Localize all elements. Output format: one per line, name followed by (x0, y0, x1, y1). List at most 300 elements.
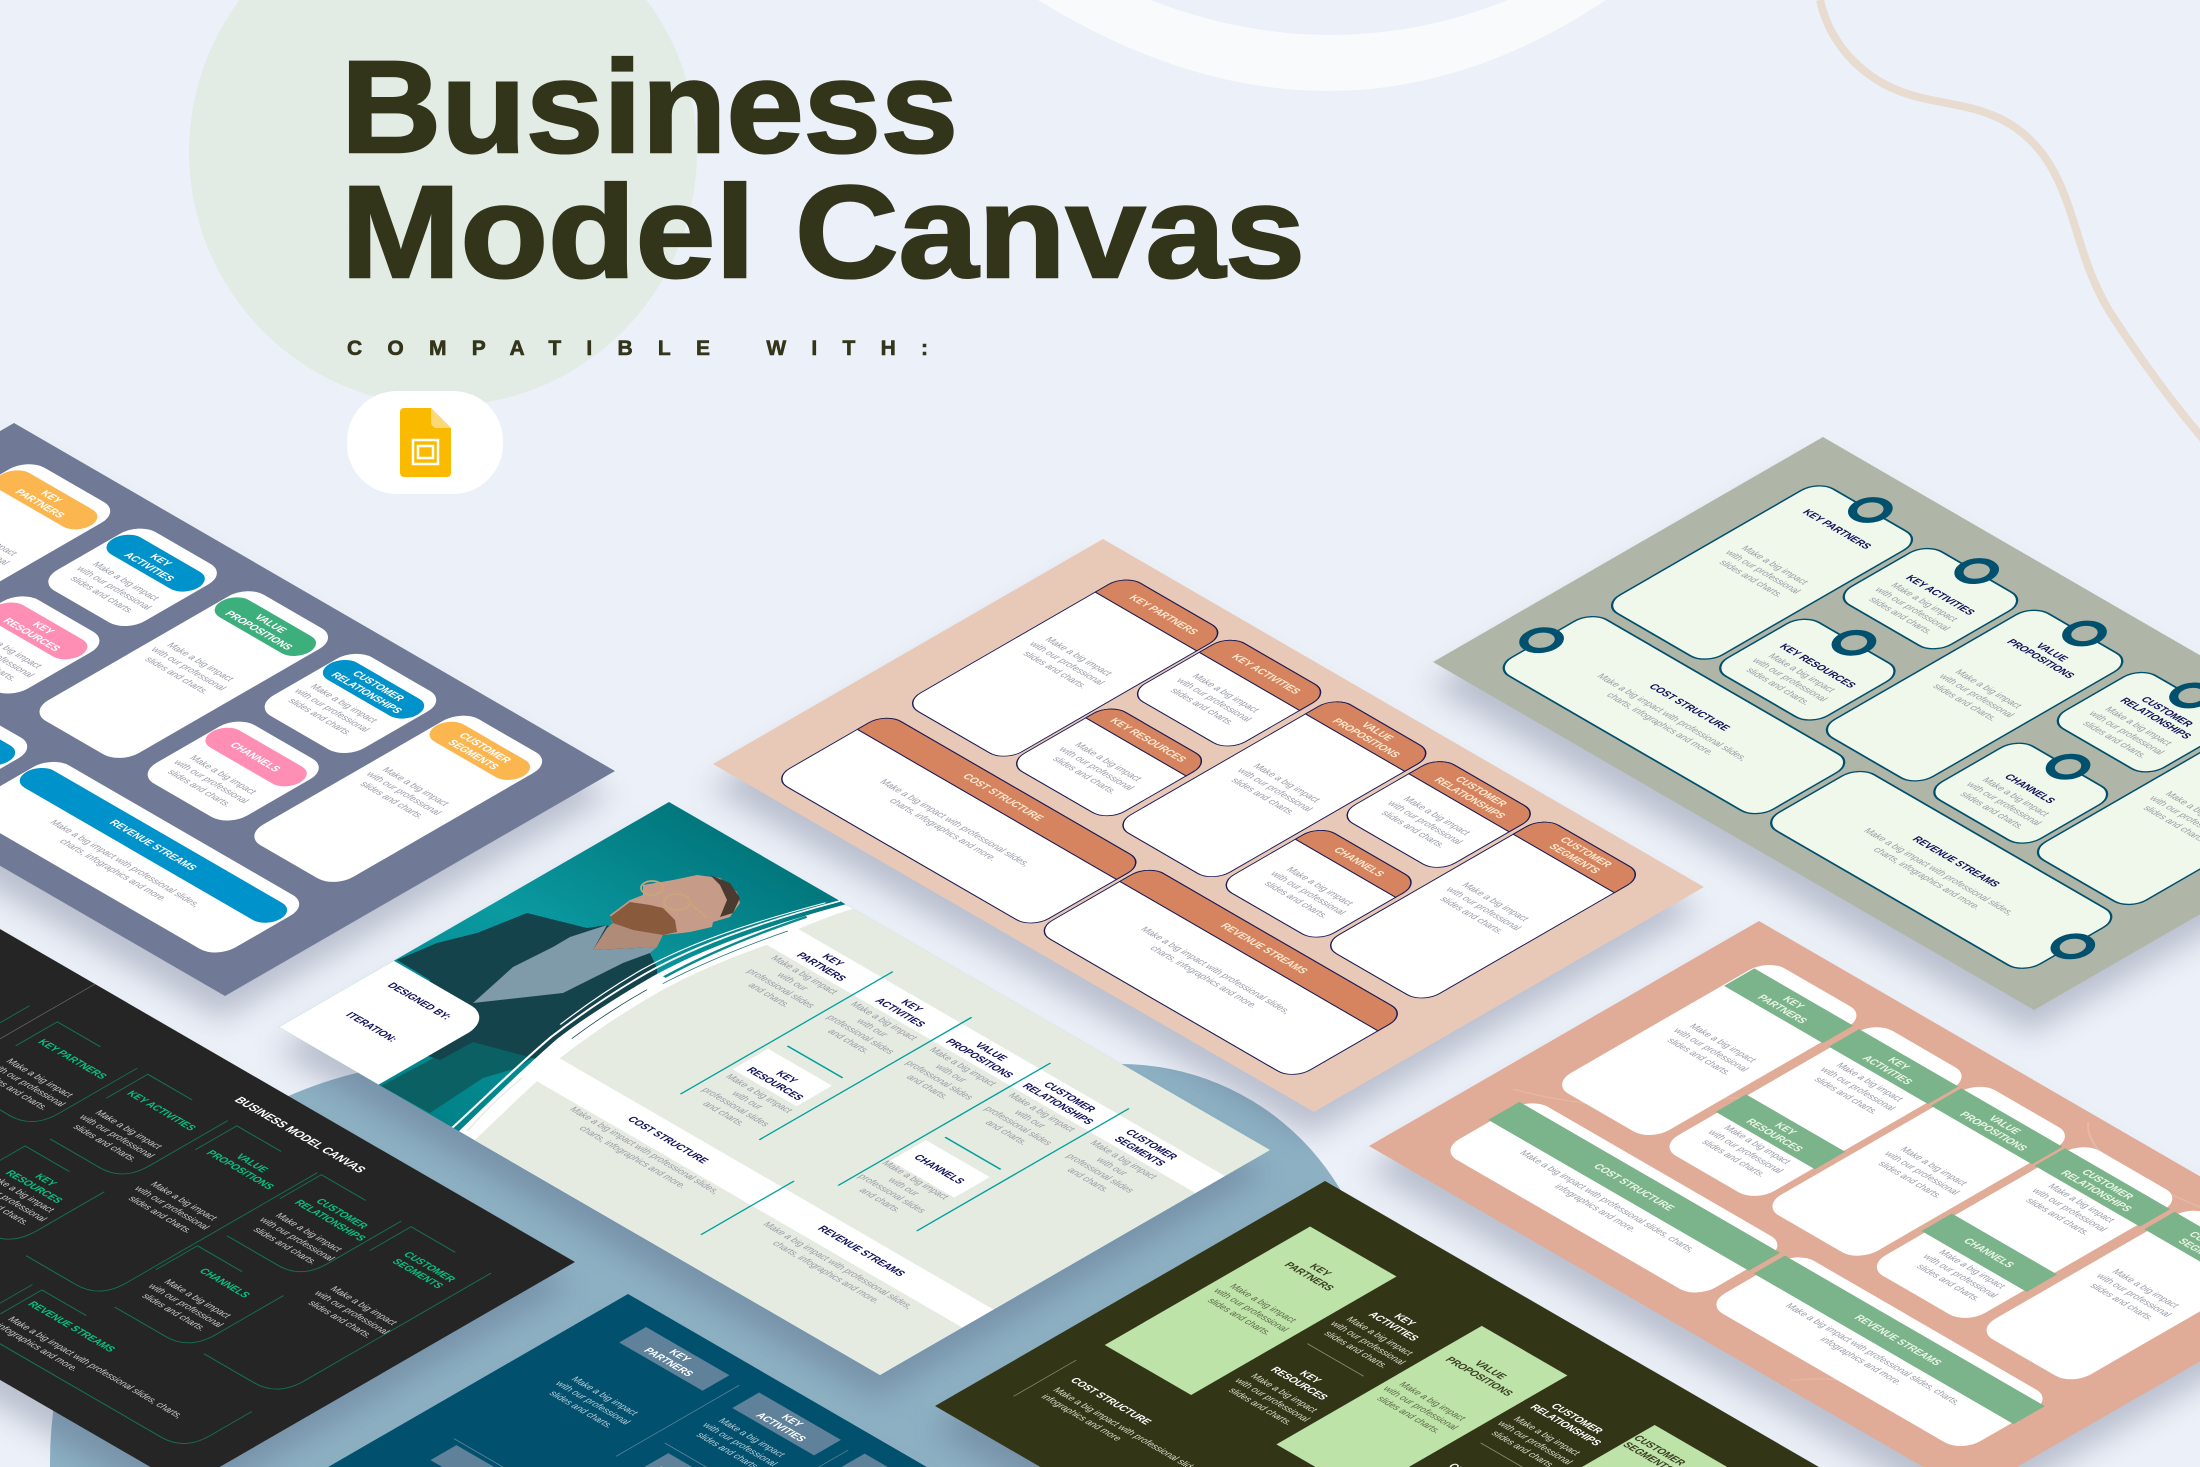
cell: value propositions (838, 1454, 947, 1467)
column: key partners: with our (773, 971, 811, 993)
card: customer segments: Make a big impact (379, 766, 452, 808)
card: value propositions: Make a big impact (1952, 668, 2025, 710)
card: cost structure: COST STRUCTURE (959, 773, 1046, 823)
card: customer relationships and channels: with our professional (1919, 1252, 2000, 1300)
cell: value propositions: slides and charts. (125, 1195, 195, 1235)
card: value propositions (1114, 696, 1435, 882)
cell: key activities: KEY (778, 1413, 805, 1429)
cell: value propositions: PROPOSITIONS (203, 1149, 276, 1191)
column: value propositions: Make a big impact (926, 1046, 999, 1088)
card: key activities and key resources: slides and charts. (1811, 1076, 1881, 1116)
slide: olive with light green cards (935, 1181, 1926, 1467)
column: value propositions: with our (931, 1062, 970, 1085)
card: customer relationships: RELATIONSHIPS (328, 671, 404, 715)
cell: customer relationships (1482, 1395, 1617, 1467)
cell: key resources: RESOURCES (2, 1169, 65, 1205)
card: key activities: KEY (147, 553, 174, 568)
card: key activities and key resources: KEY (1771, 1121, 1799, 1137)
card: revenue streams (0, 756, 310, 958)
card: key partners (903, 575, 1227, 762)
card: key activities and key resources: RESOURCES (1742, 1118, 1805, 1154)
card: key activities (1128, 635, 1330, 751)
card: customer segments (1321, 817, 1645, 1003)
slide: peach with orange headers (713, 539, 1704, 1112)
column: key partners: Make a big impact (768, 954, 840, 996)
card: value propositions: VALUE (2032, 642, 2070, 664)
card: channels: CHANNELS (227, 741, 283, 774)
card: key partners: KEY PARTNERS (1126, 594, 1200, 637)
cell: key activities: slides and charts. (70, 1123, 140, 1164)
column: key partners: PARTNERS (793, 951, 848, 983)
background tan wave (1820, 0, 2200, 440)
column: key resources: RESOURCES (743, 1066, 806, 1102)
card: cost structure: charts, infographics and more. (1603, 691, 1717, 757)
cell: customer relationships: RELATIONSHIPS (1527, 1403, 1603, 1448)
column: channels: with our (884, 1176, 923, 1198)
cell: customer segments: Make a big impact (327, 1285, 400, 1327)
cell: customer segments: SEGMENTS (389, 1258, 445, 1290)
card: customer relationships and channels: CUSTOMER (2078, 1168, 2136, 1202)
cell: key resources: KEY (32, 1173, 59, 1188)
card: revenue streams (1762, 766, 2133, 981)
card: key partners: Make a big impact (1042, 636, 1115, 678)
card: key activities: KEY ACTIVITIES (1902, 574, 1977, 617)
cell: key resources: RESOURCES (1267, 1366, 1330, 1402)
card: key activities and key resources: Make a big impact (1833, 1061, 1906, 1103)
card: key activities (1834, 535, 2041, 654)
card: designed by and iteration: ITERATION: (342, 1011, 399, 1044)
card: key resources: slides and charts. (1049, 755, 1119, 796)
card: value propositions: slides and charts. (1228, 776, 1298, 817)
card: channels: slides and charts. (164, 768, 234, 809)
card: key partners (1603, 472, 1935, 665)
card: key resources: Make a big impact (1071, 741, 1144, 783)
card: value propositions: slides and charts. (1374, 1395, 1444, 1435)
cell: key activities: with our professional (75, 1113, 157, 1160)
card: cost structure: Make a big impact with professional slides, (877, 778, 1033, 868)
card: key partners: KEY (1779, 995, 1807, 1011)
card: key activities: Make a big impact (1189, 672, 1262, 714)
cell: key partners (537, 1327, 729, 1438)
card: value propositions (29, 585, 338, 764)
card: key resources: with our professional (1055, 745, 1136, 792)
card: customer relationships (1338, 756, 1539, 873)
cell: value propositions: with our professional (130, 1184, 212, 1231)
card: customer relationships: CUSTOMER (349, 670, 407, 703)
column: value propositions (891, 1030, 1027, 1109)
slide: slate with coloured pills (0, 423, 615, 996)
card: cost structure: COST STRUCTURE (1590, 1163, 1677, 1213)
cell: key activities: Make a big impact (1343, 1315, 1416, 1358)
card: cost structure (772, 713, 1145, 928)
card: value propositions: PROPOSITIONS (2003, 638, 2077, 680)
card: revenue streams (1703, 1250, 2055, 1453)
card: customer segments: CUSTOMER (1630, 1434, 1688, 1467)
card: key activities: with our professional (1871, 585, 1953, 633)
card: key resources: KEY RESOURCES (1107, 717, 1188, 764)
card: key partners: KEY (37, 489, 65, 505)
card: customer relationships and channels: slides and charts. (1913, 1263, 1983, 1303)
card: key activities and key resources: with our professional (1816, 1065, 1898, 1112)
card: value propositions: slides and charts. (1930, 682, 2000, 723)
cell: key activities: with our professional (1326, 1319, 1408, 1367)
card: key partners: with our professional (1025, 640, 1107, 687)
card: channels: with our professional (170, 758, 251, 805)
cell: value propositions (119, 1139, 290, 1238)
column: key activities: professional slides (823, 1013, 897, 1056)
card: value propositions: with our professional (1233, 766, 1315, 813)
card: key activities and key resources (1658, 1020, 1973, 1203)
cell: key activities (1315, 1297, 1446, 1373)
cell: channels: with our professional (144, 1282, 226, 1329)
card: key activities: slides and charts. (1167, 687, 1237, 727)
cell: key resources: with our professional (1231, 1376, 1312, 1423)
card: customer segments: Make a big impact (1459, 881, 1532, 923)
column: cost structure: charts, infographics and more. (576, 1124, 689, 1190)
column: channels: and charts. (856, 1187, 904, 1214)
column: customer segments: Make a big impact (1087, 1139, 1160, 1181)
card: customer segments (1973, 1203, 2200, 1386)
heading: business model canvas: BUSINESS MODEL CANVAS (231, 1095, 369, 1175)
column: revenue streams: Make a big impact with professional slides, (760, 1221, 916, 1311)
card: cost structure (1438, 1096, 1790, 1300)
card: customer segments: with our professional (362, 770, 444, 817)
card: revenue streams: REVENUE STREAMS (1851, 1314, 1944, 1367)
card: value propositions: Make a big impact (1897, 1145, 1970, 1188)
card: revenue streams: REVENUE STREAMS (1909, 835, 2002, 889)
column: cost structure: Make a big impact with professional slides, (566, 1105, 722, 1196)
card: customer relationships and channels: with our professional (2028, 1186, 2110, 1234)
cell: key partners: KEY PARTNERS (35, 1038, 109, 1081)
card: customer segments (1448, 1425, 1740, 1467)
cell: key partners: Make a big impact (568, 1375, 641, 1417)
card: customer relationships and channels: Make a big impact (1935, 1248, 2008, 1291)
card: customer relationships and channels: CHANNELS (1960, 1237, 2016, 1270)
card: customer segments: slides and charts. (2087, 1282, 2157, 1322)
column: key partners: and charts. (745, 981, 793, 1009)
cell: revenue streams: Make a big impact with professional slides, charts, (4, 1315, 186, 1420)
card: value propositions: PROPOSITIONS (1956, 1111, 2029, 1153)
card: channels (1925, 730, 2130, 849)
slide: coral with green bands (1369, 921, 2200, 1467)
card: value propositions (1818, 597, 2146, 786)
card: channels: CHANNELS (1330, 846, 1386, 879)
column: revenue streams: charts, infographics and more. (769, 1240, 883, 1305)
card: key partners: slides and charts. (1716, 559, 1786, 599)
card: customer relationships: with our professional (2085, 709, 2167, 757)
card: revenue streams: Make a big impact with professional slides, (1860, 827, 2017, 917)
column: customer segments: professional slides (1063, 1152, 1137, 1195)
cell: key activities: KEY (1391, 1312, 1418, 1328)
card: channels: with our professional (1962, 780, 2044, 827)
card: key partners: slides and charts. (1204, 1297, 1274, 1337)
card: key partners (1105, 1226, 1397, 1395)
card: value propositions: VALUE (1985, 1114, 2023, 1136)
column: key activities: KEY (898, 998, 925, 1014)
card: key activities and key resources: slides and charts. (1698, 1138, 1768, 1179)
card: customer relationships (254, 648, 447, 759)
card: key partners: KEY PARTNERS (1799, 508, 1873, 551)
card: revenue streams: REVENUE STREAMS (106, 819, 199, 872)
card: customer relationships (2048, 659, 2200, 777)
brush swoosh white area (422, 885, 1270, 1375)
column: customer relationships: professional slides (981, 1105, 1055, 1147)
cell: key activities: slides and charts. (1321, 1330, 1391, 1370)
teal divider lines (569, 972, 1129, 1295)
column: customer relationships (969, 1075, 1107, 1155)
card: customer segments: with our professional (1442, 885, 1524, 932)
column: channels (843, 1147, 973, 1222)
card: customer segments: with our professional (2092, 1272, 2174, 1319)
column: customer relationships: CUSTOMER (1040, 1081, 1098, 1114)
column: key activities: Make a big impact (847, 1000, 920, 1042)
green cell outlines (0, 1006, 491, 1452)
card: key partners: PARTNERS (1281, 1261, 1336, 1293)
card: key resources: slides and charts. (1743, 666, 1813, 707)
cell: key resources (642, 1453, 736, 1467)
column: cost structure: COST STRUCTURE (624, 1115, 710, 1165)
cell: channels: slides and charts. (139, 1292, 209, 1333)
cell: channels (132, 1260, 264, 1336)
column: customer segments: SEGMENTS (1111, 1135, 1167, 1168)
card: key activities (38, 523, 227, 632)
card: channels (137, 716, 329, 827)
header band: key resources (733, 1049, 832, 1106)
card: key partners (1552, 959, 1868, 1142)
card: value propositions: slides and charts. (141, 655, 212, 696)
title: Model Canvas (341, 158, 1305, 305)
card: value propositions: VALUE (251, 613, 289, 635)
content background (438, 894, 1270, 1375)
background blue shape (50, 1062, 1376, 1467)
card: key partners: with our professional (1721, 548, 1803, 596)
column: key resources (687, 1056, 823, 1135)
cell: revenue streams: REVENUE STREAMS (24, 1300, 117, 1354)
card: value propositions: with our professional (147, 645, 229, 692)
card: channels: slides and charts. (1957, 790, 2027, 831)
card: customer relationships and channels (1863, 1140, 2185, 1325)
card: cost structure (1483, 604, 1854, 819)
card: cost structure: Make a big impact with professional slides, (1594, 672, 1750, 763)
card: key resources: Make a big impact (1765, 652, 1838, 694)
card: customer relationships: slides and charts. (285, 697, 355, 737)
cell: key activities: Make a big impact (715, 1417, 788, 1459)
column: customer segments: with our (1092, 1156, 1131, 1178)
column: revenue streams: REVENUE STREAMS (814, 1225, 907, 1278)
card: key activities and key resources: Make a big impact (1721, 1124, 1793, 1166)
card: customer relationships: RELATIONSHIPS (1431, 776, 1508, 821)
cell: cost structure: COST STRUCTURE (1067, 1377, 1153, 1427)
column: customer segments: and charts. (1064, 1166, 1112, 1194)
column: cost structure (555, 1094, 743, 1203)
card: cost structure: infographics and more. (1551, 1183, 1640, 1234)
card: channels: Make a big impact (1283, 866, 1356, 908)
card: channels: Make a big impact (1979, 776, 2052, 818)
card: key activities: KEY ACTIVITIES (1228, 653, 1303, 696)
column: key resources: with our (728, 1089, 766, 1112)
cell: key activities: ACTIVITIES (752, 1412, 808, 1444)
column: value propositions: and charts. (903, 1073, 951, 1101)
card: revenue streams: REVENUE STREAMS (1217, 922, 1310, 976)
card: customer relationships: Make a big impact (2102, 705, 2175, 748)
card: key activities: slides and charts. (1865, 596, 1935, 636)
photo: man in suit (381, 875, 740, 1113)
column: key activities: and charts. (824, 1028, 873, 1055)
cell: cost structure (430, 1445, 539, 1467)
card: customer segments: CUSTOMER (456, 732, 513, 765)
card: customer segments (244, 710, 552, 888)
card: key activities and key resources: KEY (1884, 1056, 1912, 1072)
column: key activities: with our (852, 1017, 891, 1039)
cell: customer segments: CUSTOMER (400, 1251, 458, 1284)
column: value propositions: professional slides (902, 1059, 976, 1102)
cell: customer relationships: CUSTOMER (1548, 1402, 1605, 1436)
cell: customer relationships: Make a big impact (272, 1212, 345, 1254)
card: cost structure (0, 600, 38, 801)
card: key partners: with our professional (1210, 1286, 1291, 1334)
card: channels: Make a big impact (186, 754, 259, 796)
card: key resources (0, 590, 110, 700)
title (341, 33, 1305, 305)
card: revenue streams: charts, infographics and more. (56, 837, 170, 903)
cell: customer relationships: slides and charts. (250, 1226, 320, 1266)
card: value propositions: PROPOSITIONS (222, 610, 295, 652)
card: channels: slides and charts. (1261, 880, 1331, 920)
card: customer relationships: Make a big impact (1400, 795, 1473, 837)
card: value propositions: slides and charts. (1875, 1160, 1945, 1200)
card: customer segments: SEGMENTS (444, 739, 501, 771)
card: key activities and key resources: with our professional (1704, 1128, 1786, 1175)
column: channels: Make a big impact (879, 1159, 952, 1201)
cell: key resources: Make a big impact (1247, 1372, 1320, 1414)
column: key resources: and charts. (699, 1100, 748, 1128)
cell: key partners: KEY (666, 1348, 693, 1364)
cell: key partners: slides and charts. (546, 1390, 616, 1430)
cell: customer relationships: CUSTOMER (313, 1198, 370, 1231)
card: key partners: Make a big impact (1686, 1022, 1759, 1065)
card: value propositions: PROPOSITIONS (1442, 1356, 1515, 1398)
card: key partners: PARTNERS (12, 488, 67, 520)
cell: customer segments (299, 1244, 470, 1343)
cell: key partners: with our professional (551, 1379, 633, 1426)
card: customer segments: slides and charts. (1437, 895, 1507, 936)
card: customer segments: Make a big impact (2109, 1268, 2182, 1310)
cell: customer relationships: RELATIONSHIPS (291, 1199, 368, 1243)
card: key activities: ACTIVITIES (121, 551, 176, 583)
subtitle: compatible with: COMPATIBLE WITH: (347, 337, 928, 360)
header band: bottom row (527, 1057, 994, 1328)
card: key resources: KEY RESOURCES (1776, 643, 1858, 690)
cell: key activities: KEY ACTIVITIES (123, 1090, 198, 1133)
column: key resources: KEY (772, 1070, 800, 1085)
card: customer relationships and channels: RELATIONSHIPS (2057, 1169, 2134, 1214)
cell: key activities: ACTIVITIES (1365, 1311, 1421, 1343)
card: value propositions: with our professional (1379, 1384, 1461, 1432)
cell: key activities (64, 1087, 201, 1167)
card: value propositions: VALUE (1358, 721, 1396, 743)
column: customer relationships: and charts. (982, 1119, 1030, 1147)
column: key resources: professional slides (699, 1086, 772, 1129)
column: customer relationships: RELATIONSHIPS (1019, 1082, 1096, 1126)
cell: value propositions: VALUE (232, 1153, 270, 1174)
card: customer relationships: Make a big impact (307, 683, 380, 725)
cell: customer relationships: with our professional (1493, 1419, 1575, 1466)
card: key partners: slides and charts. (1664, 1037, 1734, 1077)
icon: google slides badge (347, 391, 503, 494)
card: channels: with our professional (1267, 869, 1348, 917)
card: key activities: Make a big impact (89, 560, 162, 603)
card: key resources (1007, 704, 1211, 821)
cell: key partners: PARTNERS (640, 1347, 696, 1379)
card: key activities: slides and charts. (67, 575, 137, 615)
card: customer segments: SEGMENTS (1546, 843, 1602, 876)
column: channels: professional slides (855, 1172, 929, 1215)
card: customer relationships and channels: slides and charts. (2022, 1197, 2092, 1237)
card: key partners: with our professional (1669, 1026, 1751, 1073)
background white arc (1038, 0, 1606, 91)
cell: key activities: with our professional (698, 1421, 780, 1467)
column: customer segments (1051, 1123, 1187, 1202)
card: key resources (1711, 606, 1917, 725)
cell: customer segments: slides and charts. (305, 1299, 375, 1340)
card: key activities and key resources: ACTIVITIES (1859, 1054, 1915, 1087)
brush streaks (410, 878, 853, 1134)
card: customer relationships: with our professional (1383, 799, 1465, 846)
card: revenue streams: charts, infographics and more. (1870, 846, 1984, 912)
card: value propositions: with our professional (1935, 672, 2017, 719)
cell: customer segments: with our professional (310, 1289, 392, 1336)
column: customer relationships: with our (1010, 1108, 1049, 1130)
cell: customer relationships: with our professional (255, 1216, 337, 1263)
card: value propositions: Make a big impact (164, 641, 236, 683)
card: revenue streams (1035, 865, 1407, 1080)
card: value propositions: Make a big impact (1250, 762, 1323, 804)
cell: key resources: KEY (1296, 1370, 1323, 1385)
card: key activities: with our professional (72, 564, 154, 612)
card: customer relationships: CUSTOMER (1452, 775, 1509, 809)
cell: customer relationships: Make a big impact (1510, 1415, 1583, 1457)
column: key partners: professional slides (744, 967, 817, 1010)
card: key partners (0, 458, 121, 638)
column: value propositions: VALUE (972, 1041, 1009, 1063)
card: key partners: Make a big impact (1738, 544, 1811, 587)
column: key partners: KEY (819, 953, 846, 968)
card: cost structure: Make a big impact with professional slides, charts, (1516, 1149, 1698, 1254)
card: key partners: slides and charts. (1020, 650, 1090, 690)
card: key partners: KEY (1306, 1263, 1333, 1278)
cell: channels: Make a big impact (161, 1278, 234, 1320)
card: customer segments: CUSTOMER (1557, 836, 1614, 869)
card: value propositions (1276, 1326, 1567, 1467)
cell: channels: CHANNELS (196, 1267, 252, 1300)
card: customer segments: slides and charts. (357, 780, 427, 821)
card: channels (1217, 825, 1420, 943)
card: value propositions: PROPOSITIONS (1329, 717, 1402, 760)
card: designed by and iteration: DESIGNED BY: (384, 982, 453, 1022)
slide: navy with grey headers (238, 1294, 1229, 1467)
cell: key resources: slides and charts. (1225, 1387, 1295, 1427)
card: key partners: PARTNERS (1754, 994, 1809, 1026)
cell: customer relationships (244, 1190, 381, 1270)
column: key activities (812, 984, 947, 1063)
card: customer relationships: slides and charts. (2080, 720, 2150, 760)
card: revenue streams: infographics and more. (1817, 1335, 1905, 1387)
column: revenue streams (748, 1207, 940, 1318)
cell: key resources (1219, 1354, 1351, 1430)
card: key partners: Make a big impact (1226, 1282, 1299, 1325)
card: channels: CHANNELS (2001, 773, 2057, 805)
column: key partners (732, 938, 868, 1017)
